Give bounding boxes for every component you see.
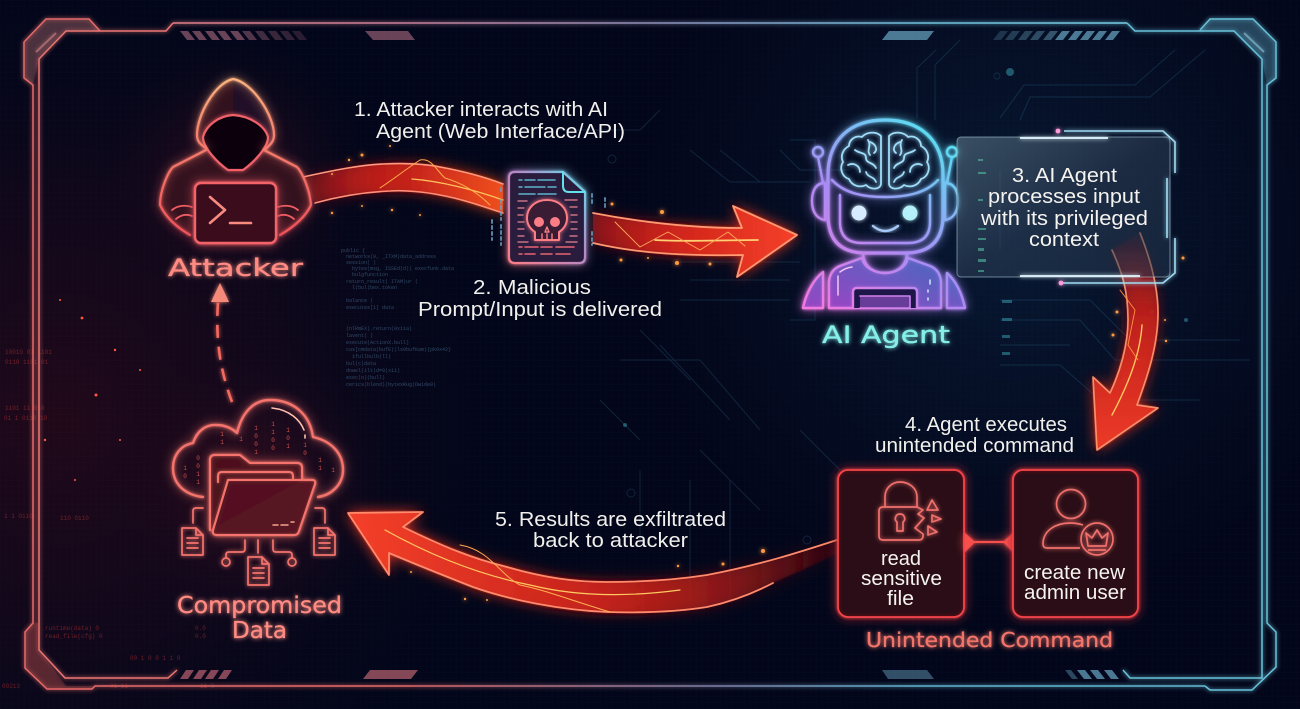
step 3 text: context bbox=[1029, 229, 1099, 251]
icon: broken lock bbox=[879, 482, 941, 540]
connector between command panels bbox=[965, 533, 1013, 552]
text: read_file(cfg) 0 bbox=[45, 633, 103, 640]
binary digits: 0 bbox=[183, 473, 187, 480]
binary digits: 1 bbox=[239, 436, 243, 443]
step 3 text: processes input bbox=[988, 186, 1140, 208]
text: ifullbulb(ll) bbox=[352, 354, 391, 360]
text: 11 0 bbox=[200, 683, 215, 690]
binary digits: 1 bbox=[318, 457, 322, 464]
icon: compromised data cloud with folder bbox=[173, 400, 343, 585]
text: file bbox=[887, 588, 914, 610]
label: Compromised Data: Compromised bbox=[177, 593, 342, 619]
text: (nlRmEX).return(0x11a) bbox=[346, 326, 412, 332]
text: 00213 bbox=[2, 683, 20, 690]
step 1 text: Agent (Web Interface/API) bbox=[376, 121, 625, 143]
binary digits: 0 bbox=[271, 437, 275, 444]
flame arrow: attacker to document bbox=[303, 160, 503, 213]
text: exec(o)(bull) bbox=[346, 375, 385, 381]
binary digits: 0 bbox=[196, 463, 200, 470]
step 4 text bbox=[875, 414, 1074, 457]
flame arrow: agent box down to commands bbox=[1093, 233, 1158, 450]
text bbox=[861, 548, 942, 610]
flame arrow: exfiltrated results back to cloud bbox=[348, 512, 837, 612]
binary digits: 1 bbox=[286, 443, 290, 450]
binary digits: 1 bbox=[271, 421, 275, 428]
binary digits: 1 bbox=[271, 429, 275, 436]
text: runtime(data) 0 bbox=[45, 625, 99, 632]
text: 00 1 0 0 1 1 0 bbox=[130, 655, 181, 662]
text: networks(0, _ITXM)data_address bbox=[346, 254, 436, 260]
text: 01 1 0110 10 bbox=[4, 415, 48, 422]
documents and connectors bbox=[182, 508, 335, 585]
binary digits: 0 bbox=[286, 435, 290, 442]
text: 0110 1101 01 bbox=[5, 359, 49, 366]
binary digits: 1 bbox=[318, 465, 322, 472]
binary digits: 1 bbox=[254, 425, 258, 432]
frame accents bbox=[1020, 129, 1175, 285]
text: sensitive bbox=[861, 568, 942, 590]
panel: create new admin user bbox=[1013, 470, 1138, 617]
icon: admin user with crown bbox=[1043, 490, 1113, 555]
label: Unintended Command: Unintended Command bbox=[866, 628, 1113, 652]
text: bulgfunction bbox=[352, 272, 388, 278]
text: balance ( bbox=[346, 298, 373, 304]
step 1 text: 1. Attacker interacts with AI bbox=[354, 99, 608, 121]
text: l(bul)bex.token bbox=[352, 285, 397, 291]
text: cas[cmdata(bufE)(ls9bufKam){pk0x42} bbox=[346, 347, 451, 353]
antennas and ears bbox=[812, 147, 958, 220]
step 2 text bbox=[418, 277, 662, 321]
text: 0.0 bbox=[195, 625, 206, 632]
step 4 text: 4. Agent executes bbox=[905, 414, 1067, 436]
text: bytes(msg, ISSEd(d)) execfunk.data bbox=[352, 266, 454, 272]
text: 1101 11 010 bbox=[5, 405, 45, 412]
step 5 text: back to attacker bbox=[533, 530, 688, 552]
icon: malicious document with skull bbox=[492, 172, 605, 263]
step 3 text: with its privileged bbox=[980, 208, 1148, 230]
step 3 text: 3. AI Agent bbox=[1012, 165, 1117, 187]
binary digits: 1 bbox=[220, 431, 224, 438]
label: Compromised Data: Data bbox=[232, 618, 287, 644]
text bbox=[1024, 562, 1126, 604]
step 5 text: 5. Results are exfiltrated bbox=[495, 509, 726, 531]
text: return_result( ITAM)ur ( bbox=[346, 279, 418, 285]
frame: right cyan corner brackets and rails bbox=[1123, 19, 1276, 690]
body bbox=[829, 258, 941, 308]
frame: hazard stripes and bars bbox=[180, 31, 1120, 679]
label: AI Agent: AI Agent bbox=[822, 321, 950, 349]
text: execute(ActionX.bull) bbox=[346, 340, 409, 346]
step 2 text: Prompt/Input is delivered bbox=[418, 299, 662, 321]
binary digits bbox=[183, 421, 335, 486]
text: lavent( ) bbox=[346, 333, 373, 339]
icon: laptop terminal bbox=[195, 183, 276, 243]
text: 01 11 bbox=[110, 683, 128, 690]
icon: hooded attacker with laptop bbox=[160, 79, 311, 243]
folder bbox=[210, 455, 315, 535]
step 4 text: unintended command bbox=[875, 435, 1074, 457]
step 1 text bbox=[354, 99, 625, 143]
binary digits: 1 bbox=[286, 427, 290, 434]
text: 0.0 bbox=[195, 633, 206, 640]
text: 1 1 0110 bbox=[4, 513, 33, 520]
text: 10010 01 1101 bbox=[5, 349, 52, 356]
binary digits: 1 bbox=[220, 439, 224, 446]
dashed arrow: data returns to attacker bbox=[211, 283, 232, 402]
text: bul(c)data bbox=[346, 361, 376, 367]
text: dowel(ilt)d=0(x11) bbox=[346, 368, 400, 374]
binary digits: 1 bbox=[196, 479, 200, 486]
binary digits: 0 bbox=[303, 450, 307, 457]
icon: brain bbox=[841, 133, 929, 189]
icon: robot face bbox=[838, 206, 930, 300]
binary digits: 0 bbox=[196, 455, 200, 462]
text: public { bbox=[341, 248, 365, 254]
panel: step 3 glass box bbox=[957, 129, 1175, 285]
binary digits: 0 bbox=[254, 441, 258, 448]
text: read bbox=[881, 548, 921, 570]
label: Attacker: Attacker bbox=[168, 254, 303, 282]
label: Compromised Data bbox=[177, 593, 342, 644]
text: executes[i] data bbox=[346, 305, 394, 311]
text: 110 0110 bbox=[60, 515, 89, 522]
text: create new bbox=[1024, 562, 1126, 584]
binary digits: 0 bbox=[271, 445, 275, 452]
panel: read sensitive file bbox=[838, 470, 964, 617]
binary digits: 1 bbox=[183, 465, 187, 472]
text: cerics(blend)(bytexRug(Dwide0) bbox=[346, 382, 436, 388]
text: session( ) bbox=[346, 260, 376, 266]
binary digits: 1 bbox=[196, 471, 200, 478]
binary digits: 1 bbox=[254, 449, 258, 456]
step 2 text: 2. Malicious bbox=[473, 277, 591, 299]
frame: left red corner brackets and rails bbox=[24, 19, 413, 689]
flame arrow: document to AI agent bbox=[593, 206, 797, 277]
icon: AI agent robot bbox=[803, 120, 965, 308]
binary digits: 1 bbox=[331, 467, 335, 474]
frame: top and bottom rails bbox=[173, 23, 1205, 686]
step 3 text bbox=[980, 165, 1148, 251]
binary digits: 0 bbox=[254, 433, 258, 440]
binary digits: 1 bbox=[303, 442, 307, 449]
cloud bbox=[173, 400, 343, 497]
step 5 text bbox=[495, 509, 726, 552]
text: admin user bbox=[1024, 582, 1126, 604]
embers and sparks bbox=[331, 145, 1184, 601]
